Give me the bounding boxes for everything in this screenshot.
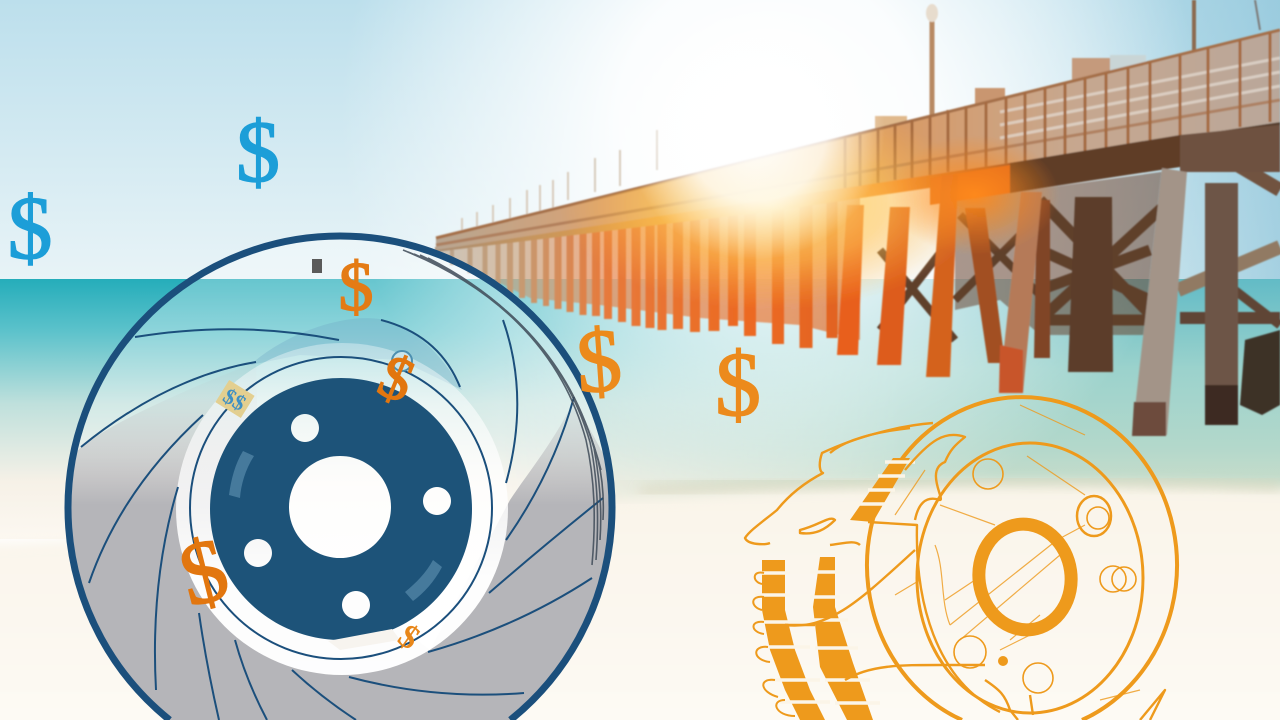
sun core over pier [620, 0, 890, 265]
orange brake drum outline [745, 397, 1177, 720]
sun glow [0, 0, 1280, 480]
disc upper tint [250, 318, 462, 390]
deck sheds [875, 55, 1146, 138]
dollar sign: blue top: $ [236, 104, 280, 201]
dark structure backing [955, 170, 1175, 335]
drum thin lines [895, 405, 1140, 700]
lamp posts [462, 0, 1260, 235]
fragment: top dark smudge [312, 259, 322, 273]
drum bolt circles [954, 459, 1136, 693]
disc inner white ring [176, 343, 508, 675]
drum housing sketch lines [745, 423, 1165, 720]
disc translucent face [68, 236, 612, 720]
pilings far [452, 196, 832, 348]
disc grey vanes area [72, 403, 608, 720]
dollar sign: orange over sea: $ [573, 311, 625, 412]
disc outer rim [68, 236, 612, 720]
fragment: orange bottom note: $ [391, 617, 426, 657]
fragment: blue note top right [392, 351, 412, 371]
fragment: blue-yellow note: $$ [219, 383, 251, 416]
dollar sign: orange over shallows: $ [715, 333, 761, 435]
drum small dot [998, 656, 1008, 666]
dollar sign: orange on disc top: $ [338, 249, 374, 326]
railing [436, 30, 1280, 250]
deck underside [435, 122, 1280, 252]
drum centre ring [972, 518, 1078, 636]
disc hub [210, 378, 472, 640]
pier [435, 0, 1280, 436]
hub highlight slivers [229, 451, 442, 601]
hub notch [328, 629, 400, 650]
pier beams [930, 125, 1280, 205]
dollar sign: orange on inner ring: $ [369, 342, 423, 416]
pier backing wall [436, 190, 860, 340]
drum tooth outlines [753, 573, 795, 716]
background: sky [0, 0, 1280, 285]
dollar sign: orange lower left: $ [170, 519, 238, 626]
large pilings [837, 168, 1280, 436]
disc vane lines [81, 320, 603, 720]
glitched money fragments on disc [215, 259, 426, 657]
sun flare on pier [578, 128, 1054, 302]
drum inner ellipse [917, 443, 1143, 713]
disc thin inner ring line [190, 357, 492, 659]
drum toothed bands [755, 458, 915, 720]
disc rim grey lines [403, 250, 603, 565]
drum outer ellipse [867, 397, 1177, 720]
background: sea [0, 279, 1280, 539]
brake disc [60, 236, 612, 720]
background: sand beach [0, 481, 1280, 720]
dollar sign: blue left: $ [8, 179, 52, 278]
cross bracing [880, 137, 1280, 340]
